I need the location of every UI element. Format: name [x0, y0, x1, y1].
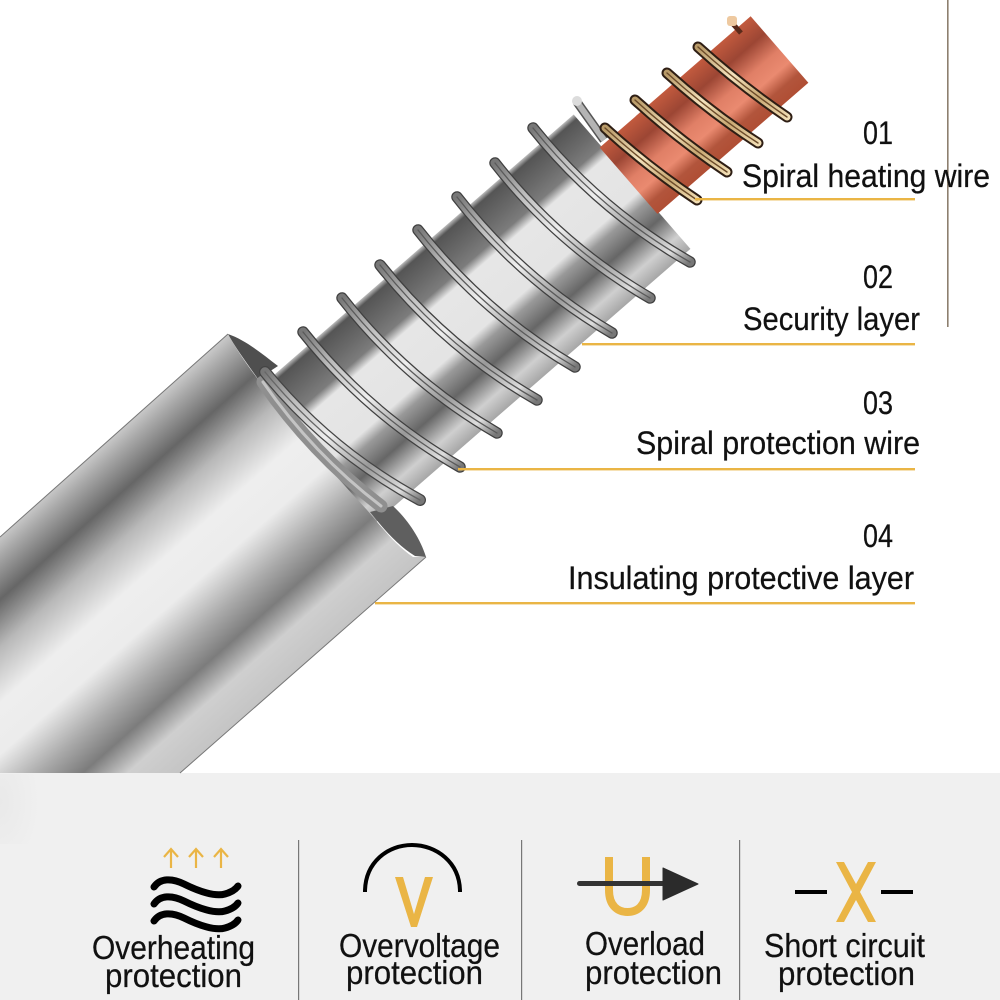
spiral protection wire rings: [303, 128, 690, 467]
icon: X letter: [836, 862, 876, 922]
panel: bottom features background: [0, 773, 1000, 1000]
icon: dashes: [795, 890, 913, 894]
outer insulating tube: [0, 334, 426, 773]
label 04: 04: [863, 518, 893, 554]
label 03: [636, 385, 920, 461]
leader lines: [375, 198, 915, 604]
label 01: [742, 115, 990, 194]
security layer steel tube: [251, 114, 690, 529]
text: overload protection: Overload: [585, 925, 705, 962]
feature: overheating protection: [92, 849, 255, 994]
copper core: [600, 16, 808, 214]
label 01: 01: [863, 115, 893, 151]
icon: arc: [365, 845, 460, 892]
feature: short circuit protection: [764, 862, 925, 992]
illustration: layered heating tube: [0, 16, 808, 773]
label 04: Insulating protective layer: [568, 560, 914, 596]
vertical rule: [947, 0, 949, 327]
label 02: Security layer: [743, 301, 920, 337]
icon: arrow: [577, 868, 698, 900]
label 03: 03: [863, 385, 893, 421]
text: overheating protection: [92, 929, 255, 994]
text: overvoltage protection: [339, 927, 500, 991]
text: short circuit protection: [764, 927, 925, 992]
label 03: Spiral protection wire: [636, 425, 920, 461]
text: short circuit protection: protection: [778, 955, 915, 992]
text: overload protection: [585, 925, 722, 991]
icon: rising heat arrows: [164, 849, 228, 868]
text: overvoltage protection: protection: [346, 954, 483, 991]
collar and first protection wire ring: [263, 372, 420, 506]
text: overload protection: protection: [585, 954, 722, 991]
dividers: [298, 840, 740, 1000]
text: short circuit protection: Short circuit: [764, 927, 925, 964]
icon: U letter: [609, 857, 646, 912]
spiral heating wire coils: [605, 47, 787, 200]
feature: overvoltage protection: [339, 845, 500, 991]
text: overheating protection: protection: [105, 957, 242, 994]
text: overvoltage protection: Overvoltage: [339, 927, 500, 964]
copper wire stub: [727, 16, 741, 33]
steel wire stub: [572, 96, 604, 140]
icon: V letter: [395, 877, 433, 927]
label 04: [568, 518, 914, 596]
text: overheating protection: Overheating: [92, 929, 255, 966]
feature: overload protection: [577, 857, 722, 991]
icon: heat waves: [154, 880, 238, 929]
label 02: [743, 259, 920, 337]
label 01: Spiral heating wire: [742, 158, 990, 194]
label 02: 02: [863, 259, 893, 295]
